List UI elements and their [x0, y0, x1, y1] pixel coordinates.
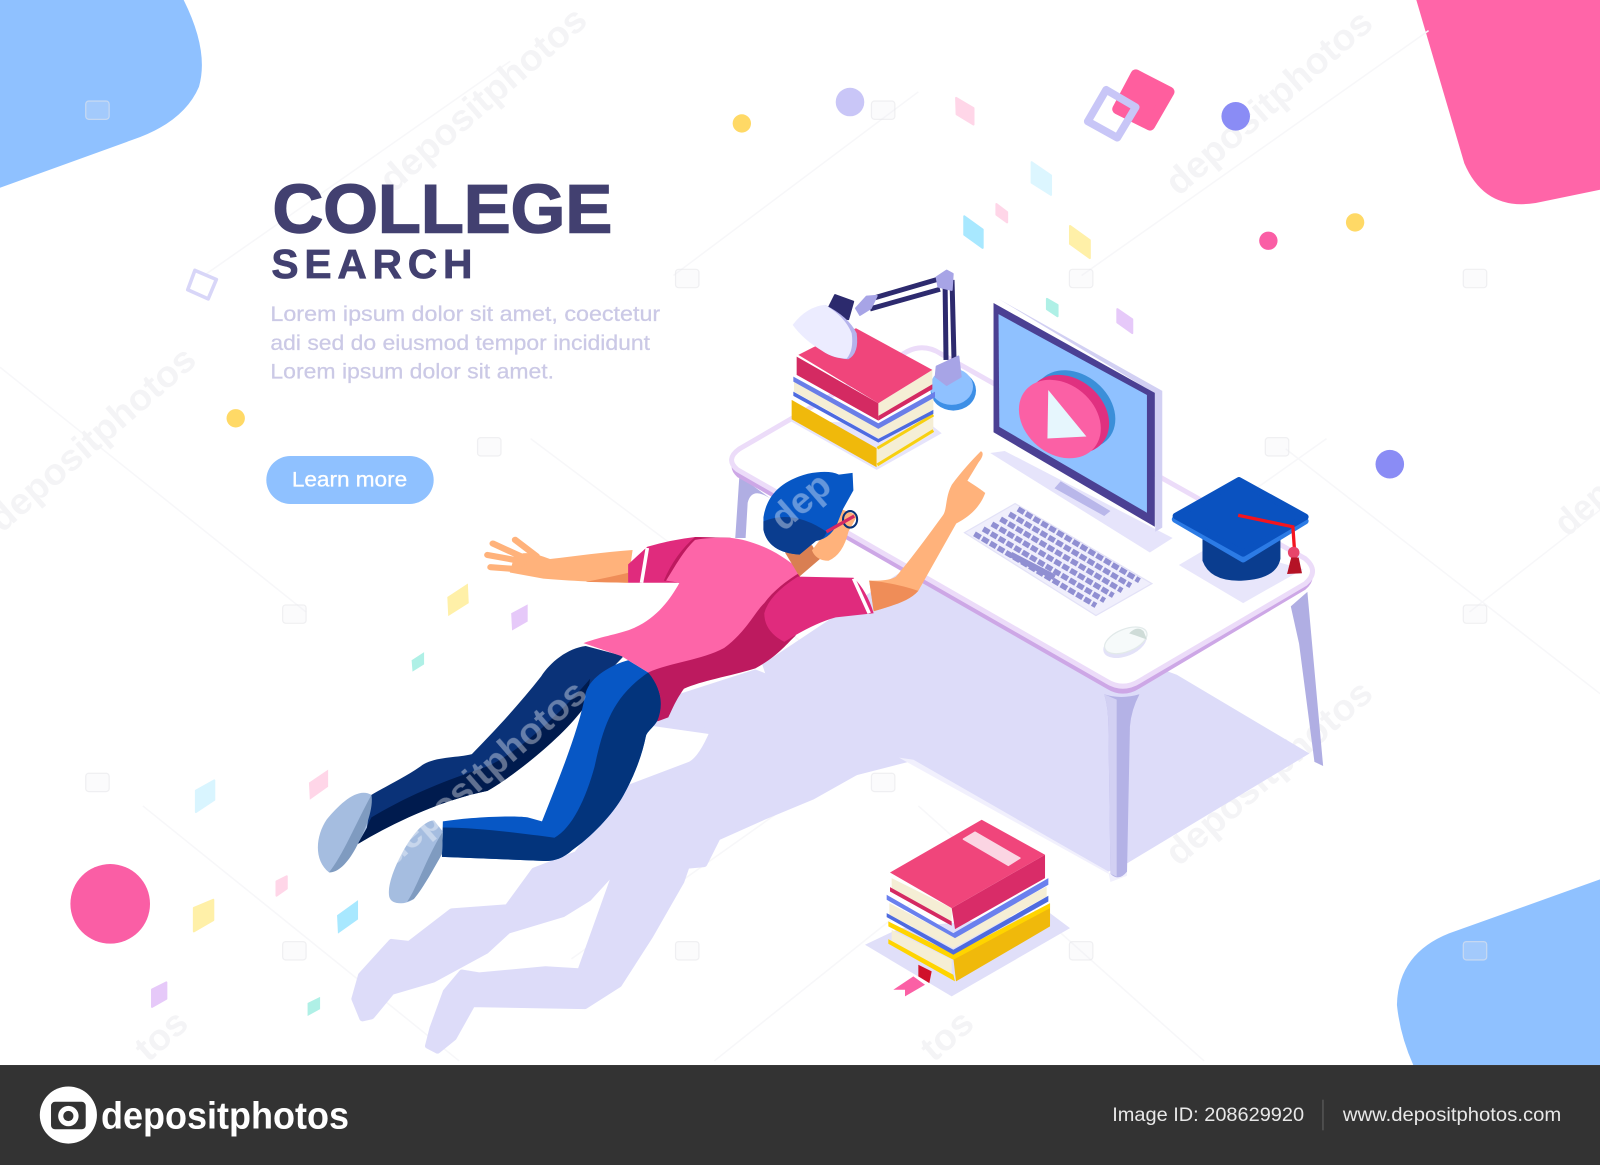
button: Learn more: Learn more — [292, 468, 407, 492]
shadow: book stack — [865, 913, 1070, 996]
keyboard — [965, 504, 1152, 616]
lamp head — [828, 295, 853, 319]
footer divider — [1322, 1100, 1323, 1130]
icon: small outline square — [188, 270, 216, 299]
faint watermark text: depositphotos — [1157, 672, 1380, 873]
faint watermark camera marks — [86, 101, 1487, 960]
shadow: desk on floor — [762, 573, 1309, 872]
faint watermark text: tos — [912, 1001, 981, 1069]
mouse — [1099, 622, 1151, 664]
icon: pink square tile — [1117, 74, 1169, 125]
blue book — [887, 878, 1048, 955]
face — [812, 509, 858, 561]
lamp and book stack — [788, 271, 976, 470]
watermark over figure — [371, 464, 839, 873]
blob: top right pink corner — [1416, 0, 1600, 204]
decorative dots — [70, 88, 1404, 944]
desk leg: front corner — [1104, 694, 1139, 877]
bookmark — [893, 965, 932, 996]
body text: Lorem ipsum dolor sit amet. — [270, 359, 554, 383]
neck — [785, 545, 820, 577]
shadow edge band — [899, 758, 1127, 882]
blue book — [793, 377, 935, 443]
monitor stand — [1054, 481, 1110, 516]
graduation cap — [1175, 480, 1305, 603]
blob: bottom right blue corner — [1397, 879, 1600, 1065]
monitor stand shadow — [990, 451, 1173, 553]
head — [763, 472, 858, 577]
watermark over figure: depositphotos — [371, 672, 594, 873]
body text — [270, 302, 660, 383]
blob: top left blue corner — [0, 0, 202, 188]
figure: student reaching for the computer — [318, 451, 985, 903]
brand name: depositphotos — [101, 1094, 349, 1136]
shadow: books — [788, 420, 942, 470]
desk edge — [732, 354, 1313, 694]
icon: camera logo — [40, 1086, 97, 1144]
red book — [797, 328, 932, 421]
pointing arm — [869, 451, 985, 611]
desk leg highlight — [1104, 694, 1117, 877]
back shoe — [318, 793, 372, 872]
icon: play button — [1003, 354, 1131, 474]
lamp joints — [856, 271, 961, 385]
right sleeve — [764, 577, 874, 642]
lamp base — [930, 368, 976, 411]
body text: adi sed do eiusmod tempor incididunt — [270, 331, 650, 355]
heading: SEARCH: SEARCH — [271, 241, 472, 287]
desk leg: back left — [735, 476, 770, 538]
monitor — [994, 299, 1162, 532]
button: Learn more — [266, 456, 434, 504]
desktop surface — [732, 348, 1313, 686]
left sleeve — [628, 537, 731, 583]
watermark over figure: dep — [762, 464, 839, 539]
faint watermark text: depositphotos — [371, 0, 594, 200]
lamp arms — [865, 279, 954, 360]
desk and desktop objects — [732, 299, 1323, 882]
book stack on floor — [865, 820, 1070, 996]
red book — [890, 820, 1045, 929]
front leg — [442, 660, 661, 861]
floating confetti tiles — [152, 98, 1132, 1007]
faint watermark text: depositphotos — [1157, 1, 1380, 203]
shirt torso — [583, 538, 800, 672]
back leg — [358, 646, 624, 844]
confetti tiles near figure — [308, 584, 528, 1016]
desk leg: right — [1291, 592, 1323, 766]
image id: Image ID: 208629920 — [1112, 1104, 1304, 1126]
website: www.depositphotos.com — [1342, 1104, 1561, 1126]
yellow book — [888, 903, 1050, 981]
front shoe — [389, 820, 443, 903]
shirt shadow — [648, 573, 800, 721]
shadow: figure on floor — [354, 603, 970, 1051]
lamp shade — [793, 305, 857, 359]
heading: COLLEGE: COLLEGE — [272, 172, 612, 248]
body text: Lorem ipsum dolor sit amet, coectetur — [270, 302, 660, 326]
hair and cap — [763, 472, 853, 555]
icon: lilac outline square — [1088, 90, 1136, 138]
footer bar — [0, 1065, 1600, 1165]
faint watermark text: tos — [126, 1001, 196, 1069]
glasses — [826, 511, 857, 532]
yellow book — [792, 400, 933, 467]
back arm and hand — [488, 540, 633, 583]
